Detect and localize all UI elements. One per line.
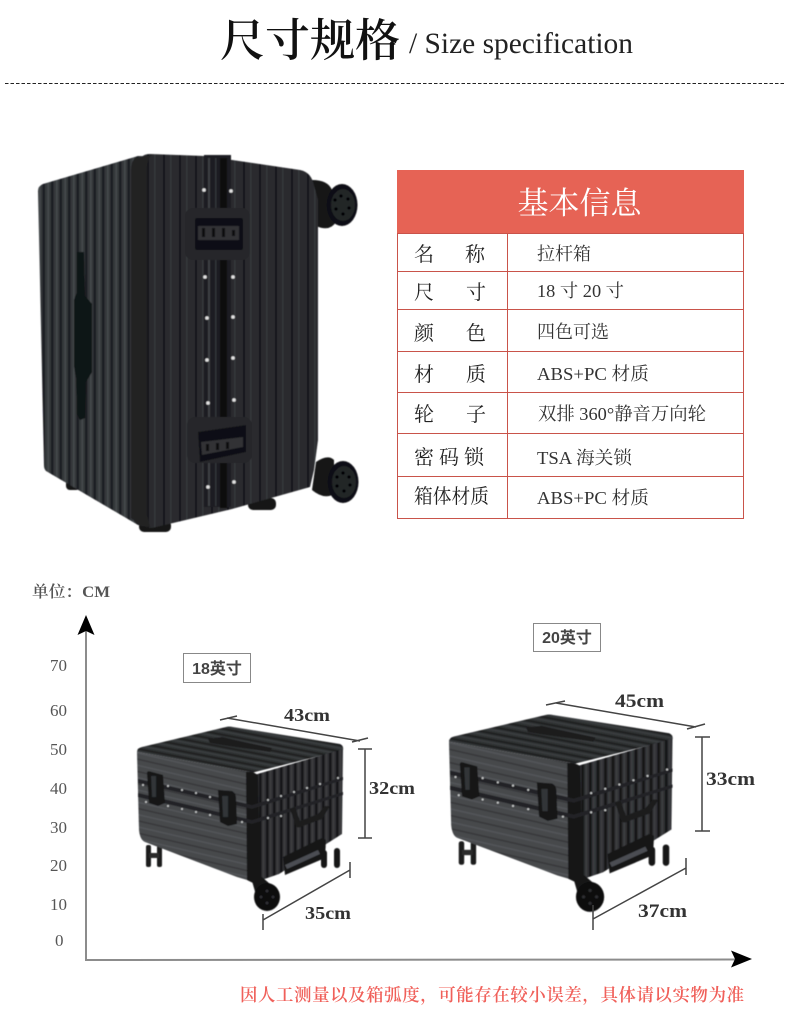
dimension labels: 20 inch: 33cm — [706, 769, 755, 790]
dimensions: 20 inch — [546, 701, 710, 930]
dimension labels: 18 inch: 32cm — [369, 778, 415, 798]
row: material: 质 — [466, 363, 486, 386]
dimension labels: 20 inch: 45cm — [615, 691, 664, 712]
wheel: bottom right — [312, 457, 358, 503]
aluminium frame — [202, 155, 236, 508]
title: 尺寸规格 — [220, 16, 400, 66]
row: shell material: 箱体材质 — [414, 485, 489, 508]
row: lock — [414, 446, 633, 469]
row: size — [414, 281, 624, 304]
label: 20 inch — [534, 624, 600, 652]
row: material: 材 — [414, 363, 434, 386]
row: size: 寸 — [466, 281, 486, 304]
dimension labels: 20 inch — [615, 691, 755, 922]
disclaimer note: 因人工测量以及箱弧度，可能存在较小误差，具体请以实物为准 — [240, 985, 744, 1006]
label: 20 inch: 20英寸 — [542, 628, 592, 647]
row: name — [414, 243, 591, 266]
unit label: 单位：CM — [32, 583, 110, 601]
lock: top — [185, 208, 250, 260]
axis tick labels: 60 — [50, 701, 67, 720]
row: colour — [414, 322, 609, 345]
row: name: 称 — [465, 243, 486, 266]
dimensions: 18 inch — [220, 716, 372, 930]
dimension labels: 20 inch: 37cm — [638, 901, 687, 922]
row: lock: 密 — [414, 446, 434, 469]
arrow: vertical axis — [78, 615, 94, 635]
table header — [397, 170, 744, 234]
row: wheels: 双排 360°静音万向轮 — [538, 404, 706, 424]
row: material: ABS+PC 材质 — [537, 364, 649, 384]
info table — [397, 170, 744, 518]
row: name: 名 — [414, 243, 434, 266]
axis tick labels: 70 — [50, 656, 67, 675]
axis tick labels: 50 — [50, 740, 67, 759]
row: colour: 颜 — [414, 322, 435, 345]
row: lock: TSA 海关锁 — [537, 448, 633, 468]
row: shell material — [414, 485, 649, 508]
axis tick labels — [50, 656, 67, 950]
row: name: 拉杆箱 — [537, 244, 591, 264]
row: colour: 色 — [466, 322, 486, 345]
lock: bottom — [187, 417, 252, 463]
chart axes — [78, 615, 752, 968]
side carry handle — [74, 252, 92, 420]
row: colour: 四色可选 — [537, 322, 609, 342]
side panel ribs — [38, 156, 143, 526]
dimension labels: 18 inch — [284, 705, 415, 923]
axis tick labels: 0 — [55, 931, 64, 950]
label: 18 inch: 18英寸 — [192, 659, 242, 678]
front panel ribs — [140, 154, 318, 528]
title — [220, 16, 633, 66]
label: 18 inch — [184, 654, 250, 682]
wheel: top right — [312, 180, 358, 228]
suitcase: 18 inch — [137, 726, 343, 911]
row: lock: 锁 — [464, 446, 485, 469]
dimension labels: 18 inch: 35cm — [305, 903, 351, 923]
row: lock: 码 — [439, 446, 459, 469]
product photo: black suitcase — [38, 154, 358, 532]
suitcase: 20 inch — [449, 714, 673, 912]
axis tick labels: 40 — [50, 779, 67, 798]
row: shell material: ABS+PC 材质 — [537, 488, 649, 508]
table header: 基本信息 — [518, 186, 642, 221]
axis tick labels: 10 — [50, 895, 67, 914]
row: wheels — [414, 403, 706, 426]
axis tick labels: 30 — [50, 818, 67, 837]
title: / Size specification — [409, 27, 633, 60]
row: material — [414, 363, 649, 386]
dimension labels: 18 inch: 43cm — [284, 705, 330, 725]
axis tick labels: 20 — [50, 856, 67, 875]
row: wheels: 子 — [466, 404, 486, 426]
feet — [66, 478, 276, 532]
row: size: 18 寸 20 寸 — [537, 281, 624, 301]
row: size: 尺 — [414, 282, 434, 304]
arrow: horizontal axis — [731, 950, 752, 968]
row: wheels: 轮 — [414, 403, 434, 426]
